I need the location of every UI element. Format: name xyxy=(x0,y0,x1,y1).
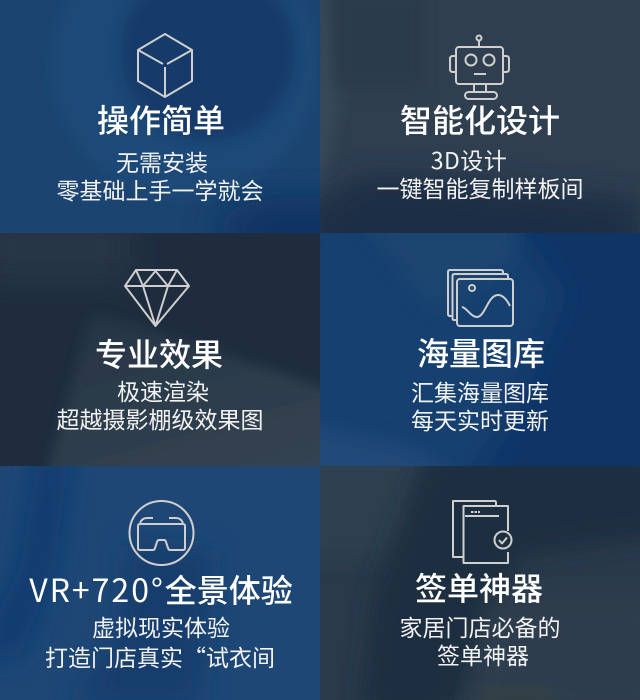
icon: diamond xyxy=(124,269,190,327)
panel: professional effects xyxy=(0,233,320,466)
heading: 专业效果: 专业效果 xyxy=(95,337,223,373)
text: description xyxy=(400,615,560,669)
text: description: 虚拟现实体验 xyxy=(92,615,230,641)
icon: VR headset xyxy=(128,500,194,566)
text: description: 打造门店真实“试衣间 xyxy=(45,639,275,673)
icon: robot xyxy=(449,34,510,100)
text: description: 超越摄影棚级效果图 xyxy=(56,407,264,433)
text: description: 每天实时更新 xyxy=(411,408,549,434)
icon: image stack xyxy=(447,269,514,327)
heading: 签单神器: 签单神器 xyxy=(415,571,543,607)
text: description: 零基础上手一学就会 xyxy=(56,178,264,204)
text: description: 签单神器 xyxy=(437,643,529,669)
heading: 海量图库: 海量图库 xyxy=(417,336,545,372)
text: description xyxy=(376,142,584,202)
icon: cube xyxy=(137,33,193,98)
text: description xyxy=(56,150,264,204)
heading: VR+720°全景体验: VR+720°全景体验 xyxy=(29,566,293,612)
text: description: 无需安装 xyxy=(116,150,208,176)
text: description xyxy=(45,615,275,673)
text: description: 极速渲染 xyxy=(117,379,209,405)
text: description: 家居门店必备的 xyxy=(400,615,560,641)
panel: VR panorama xyxy=(0,466,320,700)
panel: huge gallery xyxy=(320,233,640,466)
heading: 操作简单: 操作简单 xyxy=(97,103,225,139)
panel: easy to use xyxy=(0,0,320,233)
heading: 智能化设计: 智能化设计 xyxy=(400,103,560,139)
text: description xyxy=(411,380,549,434)
icon: documents with check xyxy=(452,500,512,564)
text: description: 一键智能复制样板间 xyxy=(376,176,584,202)
text: description xyxy=(56,379,264,433)
text: description: 汇集海量图库 xyxy=(411,380,549,406)
panel: smart design xyxy=(320,0,640,233)
text: description: 3D设计 xyxy=(431,142,507,176)
panel: sales tool xyxy=(320,466,640,700)
